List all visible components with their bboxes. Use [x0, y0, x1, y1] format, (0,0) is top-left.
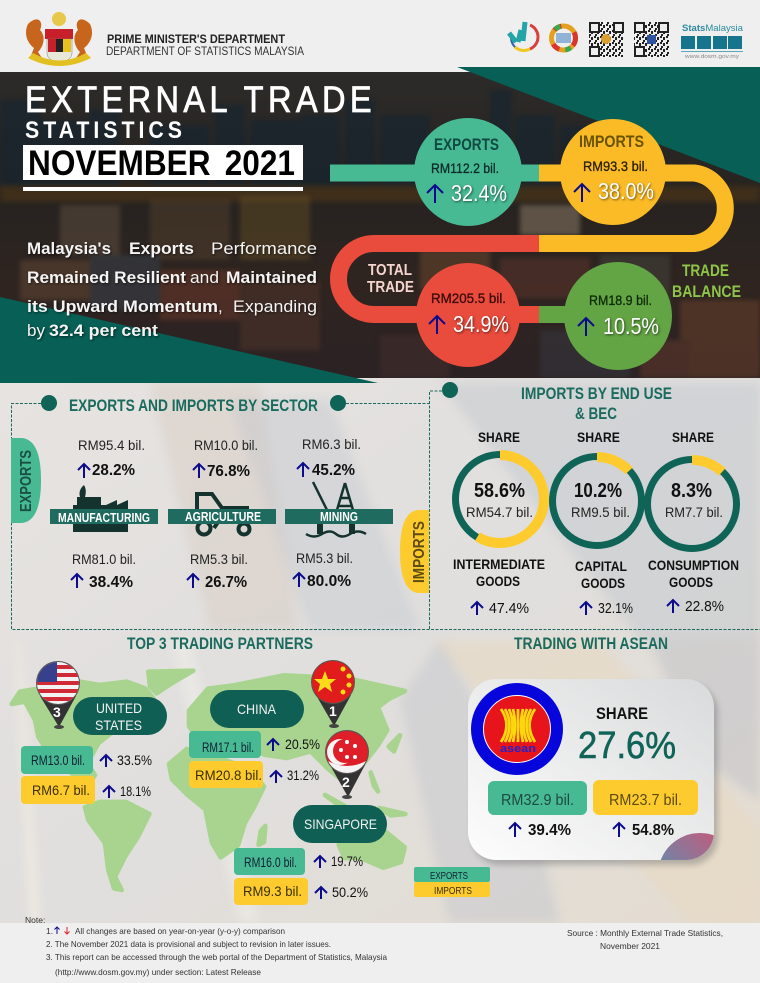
- circle: trade balance: 10.5%: [603, 313, 659, 339]
- donut: intermediate goods: INTERMEDIATE: [453, 556, 545, 572]
- donut: intermediate goods: [453, 430, 545, 617]
- donut: intermediate goods: SHARE: [478, 430, 520, 445]
- panel: ASEAN card: RM32.9 bil.: [501, 792, 574, 809]
- pill: United States: STATES: [95, 717, 142, 733]
- circle: trade balance: [564, 262, 672, 370]
- label: total trade: TOTAL: [368, 262, 412, 279]
- imports by sector values: [71, 550, 353, 591]
- icon: factory: [73, 485, 128, 532]
- donut: capital goods: 10.2%: [574, 480, 622, 502]
- world map: [12, 671, 405, 890]
- panel: ASEAN card: 27.6%: [578, 725, 676, 767]
- circle: exports: 32.4%: [451, 180, 507, 206]
- footnotes: (http://www.dosm.gov.my) under section: Latest Release: [55, 967, 261, 977]
- main title: EXTERNAL TRADE: [25, 79, 376, 120]
- summary paragraph: Maintained: [226, 268, 317, 287]
- summary paragraph: its Upward Momentum: [27, 297, 218, 316]
- donut: intermediate goods: 58.6%: [474, 480, 525, 502]
- StatsMalaysia social block: StatsMalaysia: [682, 23, 743, 33]
- QR code 2: [634, 22, 669, 57]
- heading: exports and imports by sector: EXPORTS AND IMPORTS BY SECTOR: [69, 397, 318, 415]
- legend: IMPORTS: [434, 885, 472, 897]
- circle: total trade: RM205.5 bil.: [431, 290, 506, 306]
- donut: consumption goods: 22.8%: [685, 598, 724, 615]
- pin: United States: 3: [53, 704, 61, 720]
- circle: imports: RM93.3 bil.: [583, 158, 648, 174]
- heading: imports by end use and BEC: [521, 385, 672, 423]
- circle: exports: EXPORTS: [434, 135, 499, 154]
- summary paragraph: and: [190, 268, 219, 287]
- circle: exports: RM112.2 bil.: [431, 160, 499, 176]
- donut: intermediate goods: GOODS: [476, 573, 520, 589]
- exports by sector values: RM6.3 bil.: [302, 436, 361, 452]
- figures: China: RM17.1 bil.: [202, 739, 254, 755]
- summary paragraph: Expanding: [233, 297, 317, 316]
- circle: total trade: 34.9%: [453, 311, 509, 337]
- icon: ASEAN logo: [471, 683, 563, 775]
- source: [567, 928, 723, 951]
- sector bands: [50, 509, 393, 525]
- imports by sector values: RM5.3 bil.: [296, 550, 353, 566]
- panel: ASEAN card: 54.8%: [632, 822, 674, 839]
- summary paragraph: by: [27, 321, 45, 340]
- panel: ASEAN card: RM23.7 bil.: [609, 792, 682, 809]
- pill: Singapore: SINGAPORE: [304, 816, 377, 832]
- donut: intermediate goods: 47.4%: [489, 600, 529, 617]
- tab: imports: [400, 510, 429, 593]
- figures: China: 20.5%: [285, 736, 320, 752]
- sector bands: AGRICULTURE: [185, 510, 261, 524]
- hero background: [0, 72, 760, 378]
- circle: exports: [414, 118, 522, 226]
- footnotes: 1.: [46, 926, 53, 936]
- figures: United States: RM6.7 bil.: [32, 782, 90, 798]
- panel: ASEAN card: 39.4%: [528, 822, 571, 839]
- circle: imports: IMPORTS: [579, 132, 644, 151]
- donut: consumption goods: GOODS: [669, 574, 713, 590]
- main title: [25, 79, 376, 144]
- donut: consumption goods: [648, 430, 739, 615]
- summary paragraph: ,: [218, 297, 223, 316]
- donut: capital goods: 32.1%: [598, 600, 633, 617]
- donut: capital goods: CAPITAL: [575, 558, 627, 574]
- footer bar: [0, 923, 760, 983]
- month box: NOVEMBER 2021: [28, 144, 295, 183]
- figures: Singapore: 50.2%: [332, 884, 368, 900]
- label: total trade: TRADE: [367, 279, 414, 296]
- label: trade balance: [672, 262, 741, 301]
- imports by sector values: RM5.3 bil.: [190, 551, 248, 567]
- donut: capital goods: [552, 430, 642, 617]
- main title: STATISTICS: [25, 117, 186, 144]
- footnotes: 2. The November 2021 data is provisional and subject to revision in later issues.: [46, 939, 331, 949]
- footnotes: 3. This report can be accessed through the web portal of the Department of Statistics, Malaysia: [46, 952, 387, 962]
- pill: United States: UNITED: [96, 700, 142, 716]
- footnotes: [25, 915, 387, 977]
- icon: tractor: [197, 494, 250, 534]
- exports by sector values: [78, 436, 361, 480]
- pin: China: 1: [329, 703, 337, 719]
- tab: imports: IMPORTS: [411, 521, 428, 583]
- heading: top 3 trading partners: TOP 3 TRADING PARTNERS: [127, 635, 313, 653]
- department heading: [106, 34, 304, 58]
- donut: capital goods: GOODS: [581, 575, 625, 591]
- imports by sector values: 38.4%: [89, 574, 133, 591]
- pin: Singapore: 2: [342, 774, 350, 790]
- source: Source : Monthly External Trade Statistics,: [567, 928, 723, 938]
- figures: United States: [21, 746, 152, 804]
- source: November 2021: [600, 941, 660, 951]
- donut: consumption goods: 8.3%: [671, 480, 712, 502]
- donut: consumption goods: RM7.7 bil.: [665, 504, 723, 520]
- dashed frames: [12, 391, 760, 630]
- donut: intermediate goods: RM54.7 bil.: [466, 504, 533, 520]
- pill: Singapore: [293, 805, 387, 843]
- label: trade balance: TRADE: [682, 262, 729, 280]
- QR code 1: [589, 22, 624, 57]
- panel: ASEAN card: SHARE: [596, 704, 648, 723]
- logo: coat of arms: [26, 12, 92, 66]
- exports by sector values: RM10.0 bil.: [194, 437, 258, 453]
- pill: United States: [73, 697, 167, 735]
- sector bands: MINING: [320, 510, 358, 524]
- footnotes: All changes are based on year-on-year (y-o-y) comparison: [75, 926, 285, 936]
- summary paragraph: Exports: [129, 239, 194, 258]
- donut: capital goods: RM9.5 bil.: [571, 504, 630, 520]
- circle: total trade: [416, 263, 520, 367]
- figures: China: [189, 731, 320, 788]
- exports by sector values: 28.2%: [92, 462, 135, 479]
- figures: China: RM20.8 bil.: [195, 767, 262, 783]
- imports by sector values: 26.7%: [205, 574, 247, 591]
- summary paragraph: 32.4 per cent: [49, 321, 158, 340]
- sector bands: MANUFACTURING: [58, 511, 150, 525]
- circle: imports: 38.0%: [598, 178, 654, 204]
- pin: China: [311, 660, 355, 728]
- pill: China: CHINA: [237, 701, 277, 717]
- figures: United States: RM13.0 bil.: [31, 752, 85, 768]
- summary paragraph: Performance: [211, 239, 317, 258]
- figures: China: 31.2%: [287, 767, 319, 783]
- section dots: [41, 382, 458, 411]
- logo: stats chart: [509, 22, 538, 51]
- imports by sector values: 80.0%: [307, 573, 351, 590]
- legend: EXPORTS: [430, 870, 468, 882]
- legend: [414, 867, 490, 897]
- StatsMalaysia social block: www.dosm.gov.my: [684, 54, 739, 60]
- summary paragraph: Remained Resilient: [27, 268, 186, 287]
- circle: trade balance: RM18.9 bil.: [589, 292, 652, 308]
- tab: exports: [11, 438, 41, 523]
- exports by sector values: 76.8%: [207, 463, 250, 480]
- heading: imports by end use and BEC: & BEC: [575, 405, 617, 423]
- trade flow band: [330, 173, 725, 314]
- teal corner top right: [457, 67, 760, 183]
- icon: oil rig: [306, 482, 366, 536]
- header bar: [0, 0, 760, 72]
- pill: China: [210, 690, 304, 728]
- page background: containers: [0, 378, 760, 923]
- summary paragraph: Malaysia's: [27, 239, 111, 258]
- icon: ASEAN logo: asean: [500, 743, 536, 755]
- donut: consumption goods: SHARE: [672, 430, 714, 445]
- figures: Singapore: 19.7%: [331, 853, 363, 869]
- StatsMalaysia social block: [681, 23, 743, 60]
- figures: Singapore: RM9.3 bil.: [243, 883, 302, 899]
- pin: Singapore: [325, 730, 369, 799]
- summary paragraph: [27, 239, 317, 340]
- donut: consumption goods: CONSUMPTION: [648, 557, 739, 573]
- figures: United States: 33.5%: [117, 752, 152, 768]
- imports by sector values: RM81.0 bil.: [72, 551, 136, 567]
- footnotes: Note:: [25, 915, 45, 925]
- pin: United States: [36, 661, 80, 729]
- exports by sector values: 45.2%: [312, 462, 355, 479]
- figures: Singapore: [234, 848, 368, 905]
- circle: imports: [560, 119, 666, 225]
- heading: trading with ASEAN: TRADING WITH ASEAN: [514, 635, 668, 653]
- tab: exports: EXPORTS: [18, 450, 35, 512]
- label: trade balance: BALANCE: [672, 283, 741, 301]
- label: total trade: [367, 262, 414, 296]
- department heading: DEPARTMENT OF STATISTICS MALAYSIA: [106, 46, 304, 58]
- department heading: PRIME MINISTER'S DEPARTMENT: [107, 34, 285, 46]
- exports by sector values: RM95.4 bil.: [78, 437, 145, 453]
- logo: SDG wheel: [552, 26, 576, 50]
- figures: United States: 18.1%: [120, 783, 151, 799]
- heading: imports by end use and BEC: IMPORTS BY END USE: [521, 385, 672, 403]
- panel: ASEAN card: [468, 679, 721, 868]
- teal corner bottom left: [0, 297, 378, 383]
- donut: capital goods: SHARE: [577, 430, 620, 445]
- figures: Singapore: RM16.0 bil.: [244, 854, 297, 870]
